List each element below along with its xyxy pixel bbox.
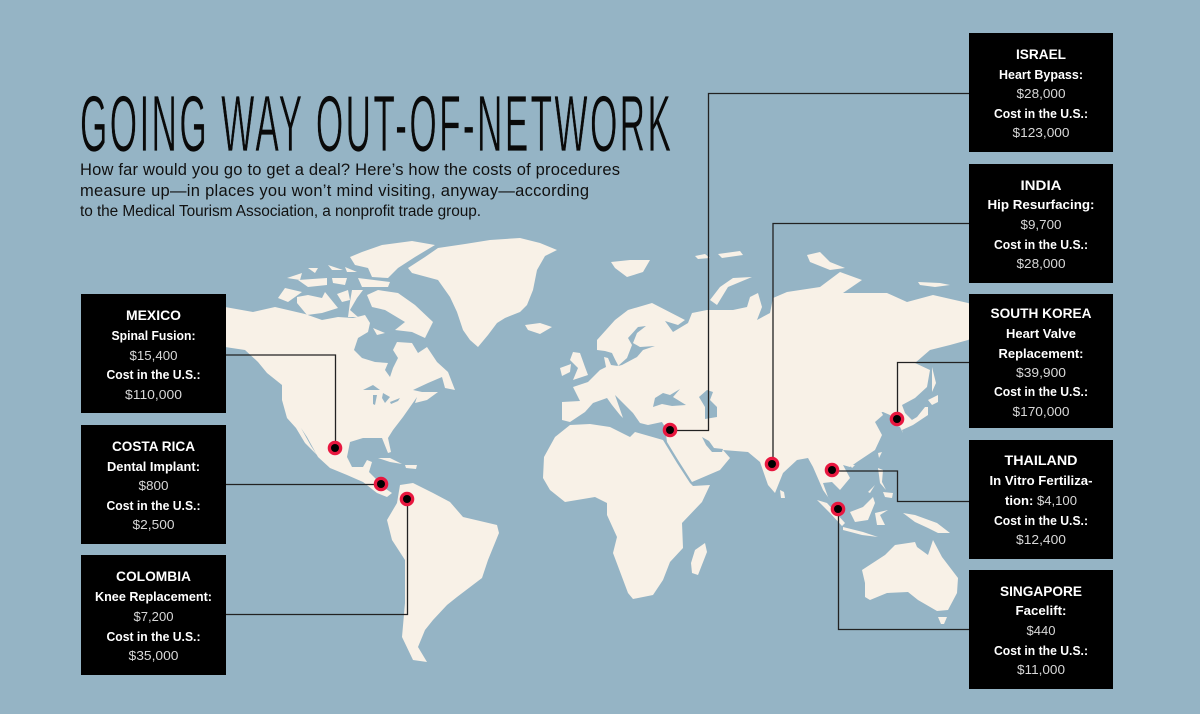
Iceland [525,323,552,334]
panel: Mexico: $15,400 [130,349,178,363]
panel: Colombia: Knee Replacement: [95,590,212,604]
panel: Colombia: $7,200 [134,610,174,624]
panel: Costa Rica: Cost in the U.S.: [106,499,200,513]
panel: Mexico: Spinal Fusion: [112,329,196,343]
marker: Singapore [831,502,845,516]
location markers [328,412,904,516]
panel: India: $28,000 [1016,257,1066,271]
panel: South Korea: Replacement: [998,347,1084,361]
panel: India: INDIA [1020,178,1062,193]
panel: Israel: $123,000 [1012,126,1070,140]
North America [225,307,455,497]
panel: Mexico [81,294,226,413]
panel: Colombia: $35,000 [128,649,179,663]
panel: Thailand: THAILAND [1004,453,1078,468]
marker: Mexico [328,441,342,455]
Japan and Sakhalin [900,367,938,433]
Africa [543,424,710,599]
intro text: measure up—in places you won’t mind visiting, anyway—according [80,182,589,200]
Caspian Sea [699,390,717,419]
panel: India: $9,700 [1020,218,1062,232]
panel: Thailand: In Vitro Fertiliza- [990,474,1092,488]
panel: Israel: $28,000 [1016,87,1066,101]
panel: Singapore: Facelift: [1016,604,1066,618]
intro text: How far would you go to get a deal? Here’s how the costs of procedures [80,161,620,179]
Australia [862,540,958,611]
panel: Thailand: $12,400 [1016,533,1066,547]
Baltic Sea [618,326,655,366]
connector lines [225,94,969,630]
title: GOING WAY OUT-OF-NETWORK [80,80,671,169]
Arctic Eurasian islands [611,251,950,305]
panel: South Korea: SOUTH KOREA [990,306,1092,321]
Eurasia [562,272,990,507]
marker: South Korea [890,412,904,426]
panel: Thailand: tion: $4,100 [1005,494,1077,508]
panel: Mexico: MEXICO [126,308,181,323]
intro text [80,161,620,220]
panel: Singapore: SINGAPORE [1000,584,1082,599]
Greenland [408,238,557,347]
Skagerrak [606,352,618,365]
panel: South Korea: $39,900 [1016,366,1066,380]
world map [225,238,990,662]
marker: Costa Rica [374,477,388,491]
panel: South Korea: $170,000 [1012,405,1070,419]
panel: Costa Rica: Dental Implant: [107,460,200,474]
Madagascar [691,543,707,575]
panel: Thailand: Cost in the U.S.: [994,514,1088,528]
marker: Colombia [400,492,414,506]
panel: Israel: Cost in the U.S.: [994,107,1088,121]
Great Lakes [363,385,400,405]
panel: Singapore: $440 [1026,624,1056,638]
South America [387,483,499,662]
panel: Mexico: Cost in the U.S.: [106,368,200,382]
panel: Israel [969,33,1113,152]
panel: India [969,164,1113,283]
panel: Costa Rica: $800 [138,479,169,493]
Southeast Asian islands [780,452,950,537]
panel: Costa Rica: COSTA RICA [112,439,195,454]
panel: Singapore [969,570,1113,689]
panel: Colombia: Cost in the U.S.: [106,630,200,644]
panel: Costa Rica: $2,500 [132,518,175,532]
Caribbean islands [378,458,417,469]
panel: India: Cost in the U.S.: [994,238,1088,252]
panel: Colombia [81,555,226,675]
British Isles [560,352,588,380]
panel: Colombia: COLOMBIA [116,569,191,584]
panel: Costa Rica [81,425,226,544]
panel: India: Hip Resurfacing: [988,198,1094,212]
panel: Mexico: $110,000 [125,388,182,402]
Black Sea [653,389,686,407]
panel: South Korea: Heart Valve [1006,327,1076,341]
panel: Israel: ISRAEL [1016,47,1066,62]
marker: Thailand [825,463,839,477]
intro text: to the Medical Tourism Association, a nonprofit trade group. [80,203,481,220]
Tasmania [938,617,947,624]
marker: Israel [663,423,677,437]
panel: South Korea: Cost in the U.S.: [994,385,1088,399]
panel: South Korea [969,294,1113,428]
panel: Singapore: $11,000 [1017,663,1065,677]
panel: Singapore: Cost in the U.S.: [994,644,1088,658]
Arctic islands [278,241,435,338]
panel: Israel: Heart Bypass: [999,68,1083,82]
Persian Gulf [702,437,723,452]
panel: Thailand [969,440,1113,559]
marker: India [765,457,779,471]
